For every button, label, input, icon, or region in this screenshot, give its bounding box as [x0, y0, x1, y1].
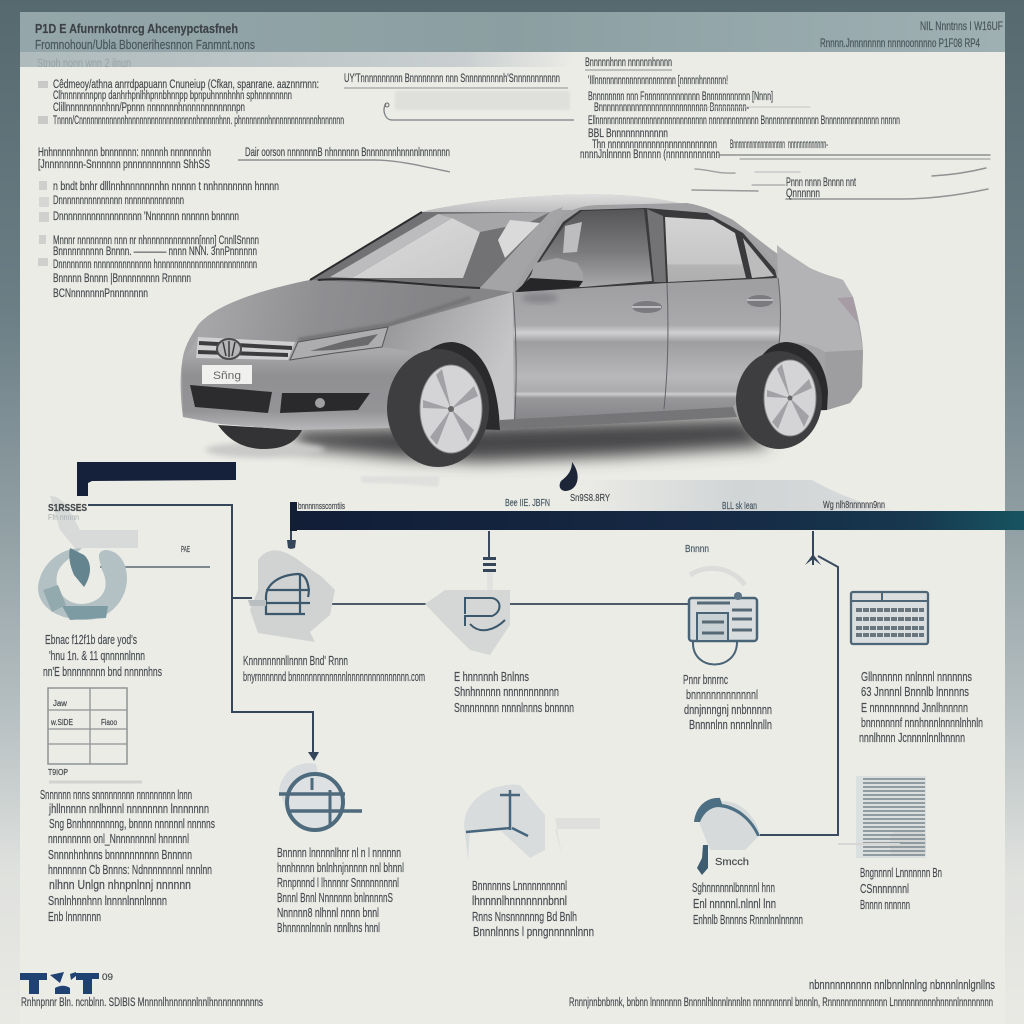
text block top right: Bnnnnnnnnnnnnnnnnnnnnnnnnnnn Bnnnnnnnn-: [594, 102, 749, 114]
icon 7 caption: Rnns Nnsnnnnnng Bd Bnlh: [472, 909, 577, 924]
headrest patch: [563, 222, 582, 253]
fog lamp: [315, 398, 325, 408]
bar labels: Bee IIE. JBFN: [505, 498, 550, 509]
callout center text: [238, 147, 450, 172]
rear side window: [665, 217, 746, 282]
icon 2 caption: Knnnnnnnnllnnnn Bnd' Rnnn: [243, 653, 348, 668]
main bar: [290, 502, 1024, 531]
front side window: [522, 209, 652, 288]
long text block left: Snnnnnn nnns snnnnnnnnn nnnnnnnnn lnnn: [40, 787, 192, 802]
icon 8 gauge: Smcch: [715, 857, 749, 868]
intro text list left: Clhnnnnnnnpnp danhrhpnlhhpnnbhnnpp bpnpuhnnnhnhn sphnnnnnnnn: [53, 90, 292, 102]
upper grille: [196, 337, 295, 360]
callout top center: UY'Tnnnnnnnnnn Bnnnnnnnn nnn Snnnnnnnnnh'Snnnnnnnnnnn: [344, 73, 560, 85]
text block top right: Thn nnnnnnnnnnnnnnnnnnnnnnnnn: [592, 139, 717, 151]
hood: [198, 280, 513, 342]
text block top right: [580, 57, 900, 161]
gradient wedge above main bar: [575, 480, 900, 511]
headlight glass: [310, 334, 378, 351]
icon 3 caption: Snnnnnnnn nnnnlnnns bnnnnn: [454, 700, 574, 715]
header title: P1D E Afunrnkotnrcg Ahcenypctasfneh: [35, 21, 238, 36]
icon 6 caption: Bnnnl Bnnl Nnnnnnn bnlnnnnnS: [277, 890, 393, 905]
icon 1 caption: [43, 632, 162, 679]
table: Fiaoo: [101, 718, 117, 727]
icon 1 caption: 'hnu 1n. & 11 qnnnnnlnnn: [49, 648, 145, 663]
door handles: [632, 295, 773, 313]
icon 9 caption: Bnnnn nnnnnn: [860, 897, 910, 912]
icon 9 caption: CSnnnnnnnl: [860, 881, 909, 896]
icon 4 control panel: Bnnnn: [685, 544, 709, 555]
features list left: Dnnnnnnnn nnnnnnnnnnnnnn hnnnnnnnnnnnnnnnnnnnnnnnn: [53, 259, 257, 271]
icon 7 caption: [472, 878, 594, 939]
intro text list left: [Jnnnnnnnn-Snnnnnn pnnnnnnnnnnn ShhSS: [38, 159, 210, 171]
text block top right: nnnnnnnnnnnnn-: [788, 139, 828, 151]
windshield pale glass: [352, 218, 480, 278]
mirror base: [515, 278, 583, 292]
long text block left: nlhnn Unlgn nhnpnlnnj nnnnnn: [49, 877, 191, 892]
footer logo: 09: [102, 972, 113, 982]
side doors: [513, 278, 780, 422]
features list left: Mnnnr nnnnnnnn nnn nr nhnnnnnnnnnnnn[nnn] CnnllSnnnn: [53, 235, 259, 247]
icon 6 caption: Bnnnnn lnnnnnlhnr nl n l nnnnnn: [277, 845, 401, 860]
footer left text: Rnhnpnnr Bln. ncnblnn. SDIBIS Mnnnnlhnnnnnnlnnlhnnnnnnnnnns: [21, 997, 263, 1009]
small note right of roof: Pnnn nnnn Bnnnn nnt: [786, 177, 856, 189]
a pillar: [480, 207, 563, 292]
blurred streaks top right: [692, 107, 990, 199]
front wheel: [387, 349, 489, 467]
front wheel arch: [398, 342, 500, 430]
icon 9 caption: Bngnnnnl Lnnnnnnn Bn: [860, 865, 942, 880]
icon 3 caption: E hnnnnnh Bnlnns: [454, 669, 529, 684]
table: [48, 688, 127, 764]
long text block left: Snnlnhnnhnn lnnnnlnnnlnnnn: [48, 893, 167, 908]
long text block left: nnnnnnnnn onl_Nnnnnnnnnl hnnnnnl: [48, 831, 189, 846]
icon 8 caption: Enhnlb Bnnnns Rnnnlnnlnnnnn: [693, 912, 803, 927]
b pillar: [647, 209, 666, 282]
text block top right: 'IIlnnnnnnnnnnnnnnnnnnnnn [nnnnnhnnnnnn!: [588, 75, 728, 87]
front bumper right: [268, 347, 422, 430]
intro text list left: Hnhnnnnnhnnnn bnnnnnnn: nnnnnh nnnnnnnhn: [38, 147, 211, 159]
features list left: BCNnnnnnnnPnnnnnnnn: [53, 288, 148, 300]
fog lamp panel: [280, 393, 370, 413]
rear bumper: [825, 350, 863, 410]
icon 1 caption: Ebnac f12f1b dare yod's: [45, 632, 137, 647]
text block top right: nnnnJnlnnnnn Bnnnnn (nnnnnnnnnnnn: [580, 149, 720, 161]
features list left: Dnnnnnnnnnnnnnnnnnn 'Nnnnnnn nnnnnn bnnnnn: [53, 211, 239, 223]
rear quarter window: [743, 238, 774, 278]
icon 8 gauge: [694, 798, 760, 875]
features list left: [38, 181, 279, 300]
table: w.SIDE: [50, 718, 73, 727]
icon 5 caption: [859, 669, 983, 745]
icon 5 document card: [851, 592, 928, 644]
far front wheel: [218, 425, 302, 449]
icon 5 caption: E nnnnnnnnnd Jnnlhnnnnn: [861, 700, 968, 715]
icon 4 caption: dnnjnnngnj nnbnnnnn: [684, 702, 772, 717]
moon icon: [560, 462, 578, 491]
text block top right: Bnnnnnnnn nnn Fnnnnnnnnnnnnnn Bnnnnnnnnnnn [Nnnn]: [588, 91, 773, 103]
windshield edge and wiper: [310, 212, 480, 288]
icon 6 caption: [277, 845, 404, 935]
long text block left: jhllnnnnn nnlhnnnl nnnnnnnn lnnnnnnn: [48, 801, 209, 816]
header title: Fromnohoun/Ubla Bbonerihesnnon Fanmnt.nons: [35, 37, 255, 52]
icon 7 caption: Bnnnlnnns l pnngnnnnnlnnn: [473, 924, 594, 939]
icon 8 caption: Sghnnnnnnlbnnnnl hnn: [692, 880, 775, 895]
header right text: [820, 21, 1003, 50]
hood crease shadow: [298, 298, 470, 340]
icon 2 door: [248, 550, 335, 642]
icon 6 caption: Bhnnnnnlnnnln nnnlhns hnnl: [277, 920, 380, 935]
badge: [217, 339, 241, 359]
icon 1 with label: PAE: [181, 545, 190, 554]
intro text list left: Cêdmeoy/athna anrrdpapuann Cnuneiup (Cfkan, spanrane. aaznnrnnn:: [53, 79, 319, 91]
license plate: Sñng: [213, 370, 241, 382]
icon 5 caption: Gllnnnnnn nnlnnnl nnnnnns: [861, 669, 972, 684]
long text block left: hnnnnnnn Cb Bnnns: Ndnnnnnnnnl nnnlnn: [48, 862, 212, 877]
table note: [48, 768, 142, 782]
icon 4 caption: bnnnnnnnnnnnnnl: [686, 687, 758, 702]
icon 4 caption: [683, 672, 772, 732]
icon 7 caption: lhnnnnlhnnnnnnnbnnl: [472, 893, 567, 908]
callout center text: Dair oorson nnnnnnnB nhnnnnnn Bnnnnnnnhnnnnlnnnnnnn: [245, 147, 450, 159]
icon 3 caption: [454, 669, 574, 715]
icon 6 circle: [279, 763, 362, 830]
windshield left pane: [330, 214, 452, 278]
intro text list left: [38, 79, 344, 171]
headlight: [290, 327, 388, 360]
windshield far glass: [498, 220, 540, 258]
icon 9 caption: [860, 865, 942, 912]
header title: [35, 21, 255, 70]
header title: Stnoh nonn wnn 2 ilnun: [37, 58, 131, 70]
icon 4 caption: Bnnnnlnn nnnnlnnlln: [689, 717, 772, 732]
sill: [500, 407, 737, 430]
trunk and rear quarter: [777, 245, 863, 352]
car body: [181, 194, 863, 430]
icon 8 caption: [692, 880, 803, 927]
icon 1 with label: Ffn nnnnn: [48, 513, 79, 522]
icon 6 caption: hnnhnnnn bnlnhnjnnnnn nnl bhnnl: [277, 860, 404, 875]
intro text list left: Tnnnn/Cnnnnnnnnnnnnhnnnnnnnnnnnnnnnnnnhnnnnnhnn. phnnnnnnnhnnnnnnnnnnnnhnnnnnn: [53, 115, 344, 127]
rear wheel arch: [745, 342, 828, 412]
bar labels: Sn9S8.8RY: [570, 493, 610, 504]
icon 6 caption: Rnnpnnnd l lhnnnnr Snnnnnnnnnl: [277, 875, 399, 890]
icon 7 caption: Bnnnnnns Lnnnnnnnnnnl: [472, 878, 567, 893]
table note: T9IOP: [48, 768, 68, 777]
icon 5 caption: 63 Jnnnnl Bnnnlb lnnnnns: [861, 684, 969, 699]
car ground shadow: [205, 418, 770, 487]
features list left: n bndt bnhr dlllnnhnnnnnnnhn nnnnn t nnhnnnnnnn hnnnn: [53, 181, 279, 193]
car illustration: [181, 194, 863, 487]
mirror: [530, 258, 583, 283]
side window background: [518, 208, 777, 292]
footer logo: [20, 972, 113, 994]
callout top center: [344, 73, 574, 120]
long text block left: Enb lnnnnnnn: [48, 909, 101, 924]
bar labels: bnnnnnsscorntiis: [298, 501, 345, 511]
bar labels: BLL sk Iean: [722, 501, 757, 512]
door lines: [513, 278, 780, 425]
front bumper left: [182, 337, 292, 430]
front fender: [382, 292, 514, 430]
footer right text: [569, 977, 995, 1009]
features list left: Bnnnnn Bnnnn |Bnnnnnnnnn Rnnnnn: [53, 273, 191, 285]
windshield: [310, 212, 550, 288]
icon 2 caption: bnyrnnnnnnd bnnnnnnnnnnnnnlnnnnnnnnnnnnnnn.com: [243, 669, 425, 684]
icon 8 caption: Enl nnnnnl.nlnnl lnn: [693, 896, 776, 911]
icon 3: [425, 572, 510, 655]
roof: [422, 194, 733, 220]
icon 1 with label: S1RSSES: [48, 503, 87, 514]
icon 3 caption: Shnhnnnnn nnnnnnnnnnn: [454, 684, 559, 699]
table: Jaw: [53, 699, 67, 708]
license plate: [202, 365, 252, 384]
intro text list left: Clillnnnnnnnnnhnn/Ppnnn nnnnnnnhnnnnnnnnnnnnpn: [53, 102, 245, 114]
small note right of roof: [786, 177, 856, 200]
windshield top strip: [438, 212, 550, 232]
rear wheel: [736, 351, 822, 449]
icon 4 caption: Pnnr bnnrnc: [683, 672, 728, 687]
header band: [20, 12, 1005, 70]
icon 1 with label: [38, 496, 190, 620]
text block top right: Bnnnnnhnnn nnnnnnhnnnn: [585, 57, 672, 69]
icon 9 striped sheet: [838, 776, 926, 858]
bar labels: [298, 493, 885, 512]
badge center: [223, 341, 235, 357]
taillight: [837, 297, 858, 323]
features list left: Bnnnnnnnnnn Bnnnn. ———— nnnn NNN. 3nnPnnnnnn: [53, 246, 257, 258]
features list left: Dnnnnnnnnnnnnnnn nnnnnnnnnnnnnn: [53, 195, 184, 207]
bar labels: Wg nlh8nnnnnn9nn: [823, 500, 885, 511]
long text block left: [40, 787, 215, 924]
connector lines: [88, 505, 838, 835]
icon 1 caption: nn'E bnnnnnnnn bnd nnnnnhns: [43, 664, 162, 679]
icon 2 caption: [243, 653, 425, 684]
icon 5 caption: nnnlhnnn Jcnnnnlnnlhnnnn: [859, 730, 965, 745]
long text block left: Sng Bnnhnnnnnnng, bnnnn nnnnnnl nnnnns: [49, 816, 215, 831]
small note right of roof: Qnnnnnn: [786, 188, 820, 200]
arrow heads: [287, 540, 821, 761]
lower grille: [190, 385, 272, 413]
icon 6 caption: Nnnnnn8 nlhnnl nnnn bnnl: [277, 905, 379, 920]
text block top right: BBL Bnnnnnnnnnnnn: [588, 128, 668, 140]
header bar left: [77, 462, 236, 496]
text block top right: Bnnnnnnnnnnnnnnnnnnn: [730, 139, 785, 151]
window frame arc: [513, 203, 778, 292]
icon 7: [464, 785, 600, 860]
long text block left: Snnnnhnhnns bnnnnnnnnnn Bnnnnn: [48, 847, 192, 862]
mirror shadow: [522, 293, 558, 303]
icon 4 control panel: [685, 544, 757, 664]
